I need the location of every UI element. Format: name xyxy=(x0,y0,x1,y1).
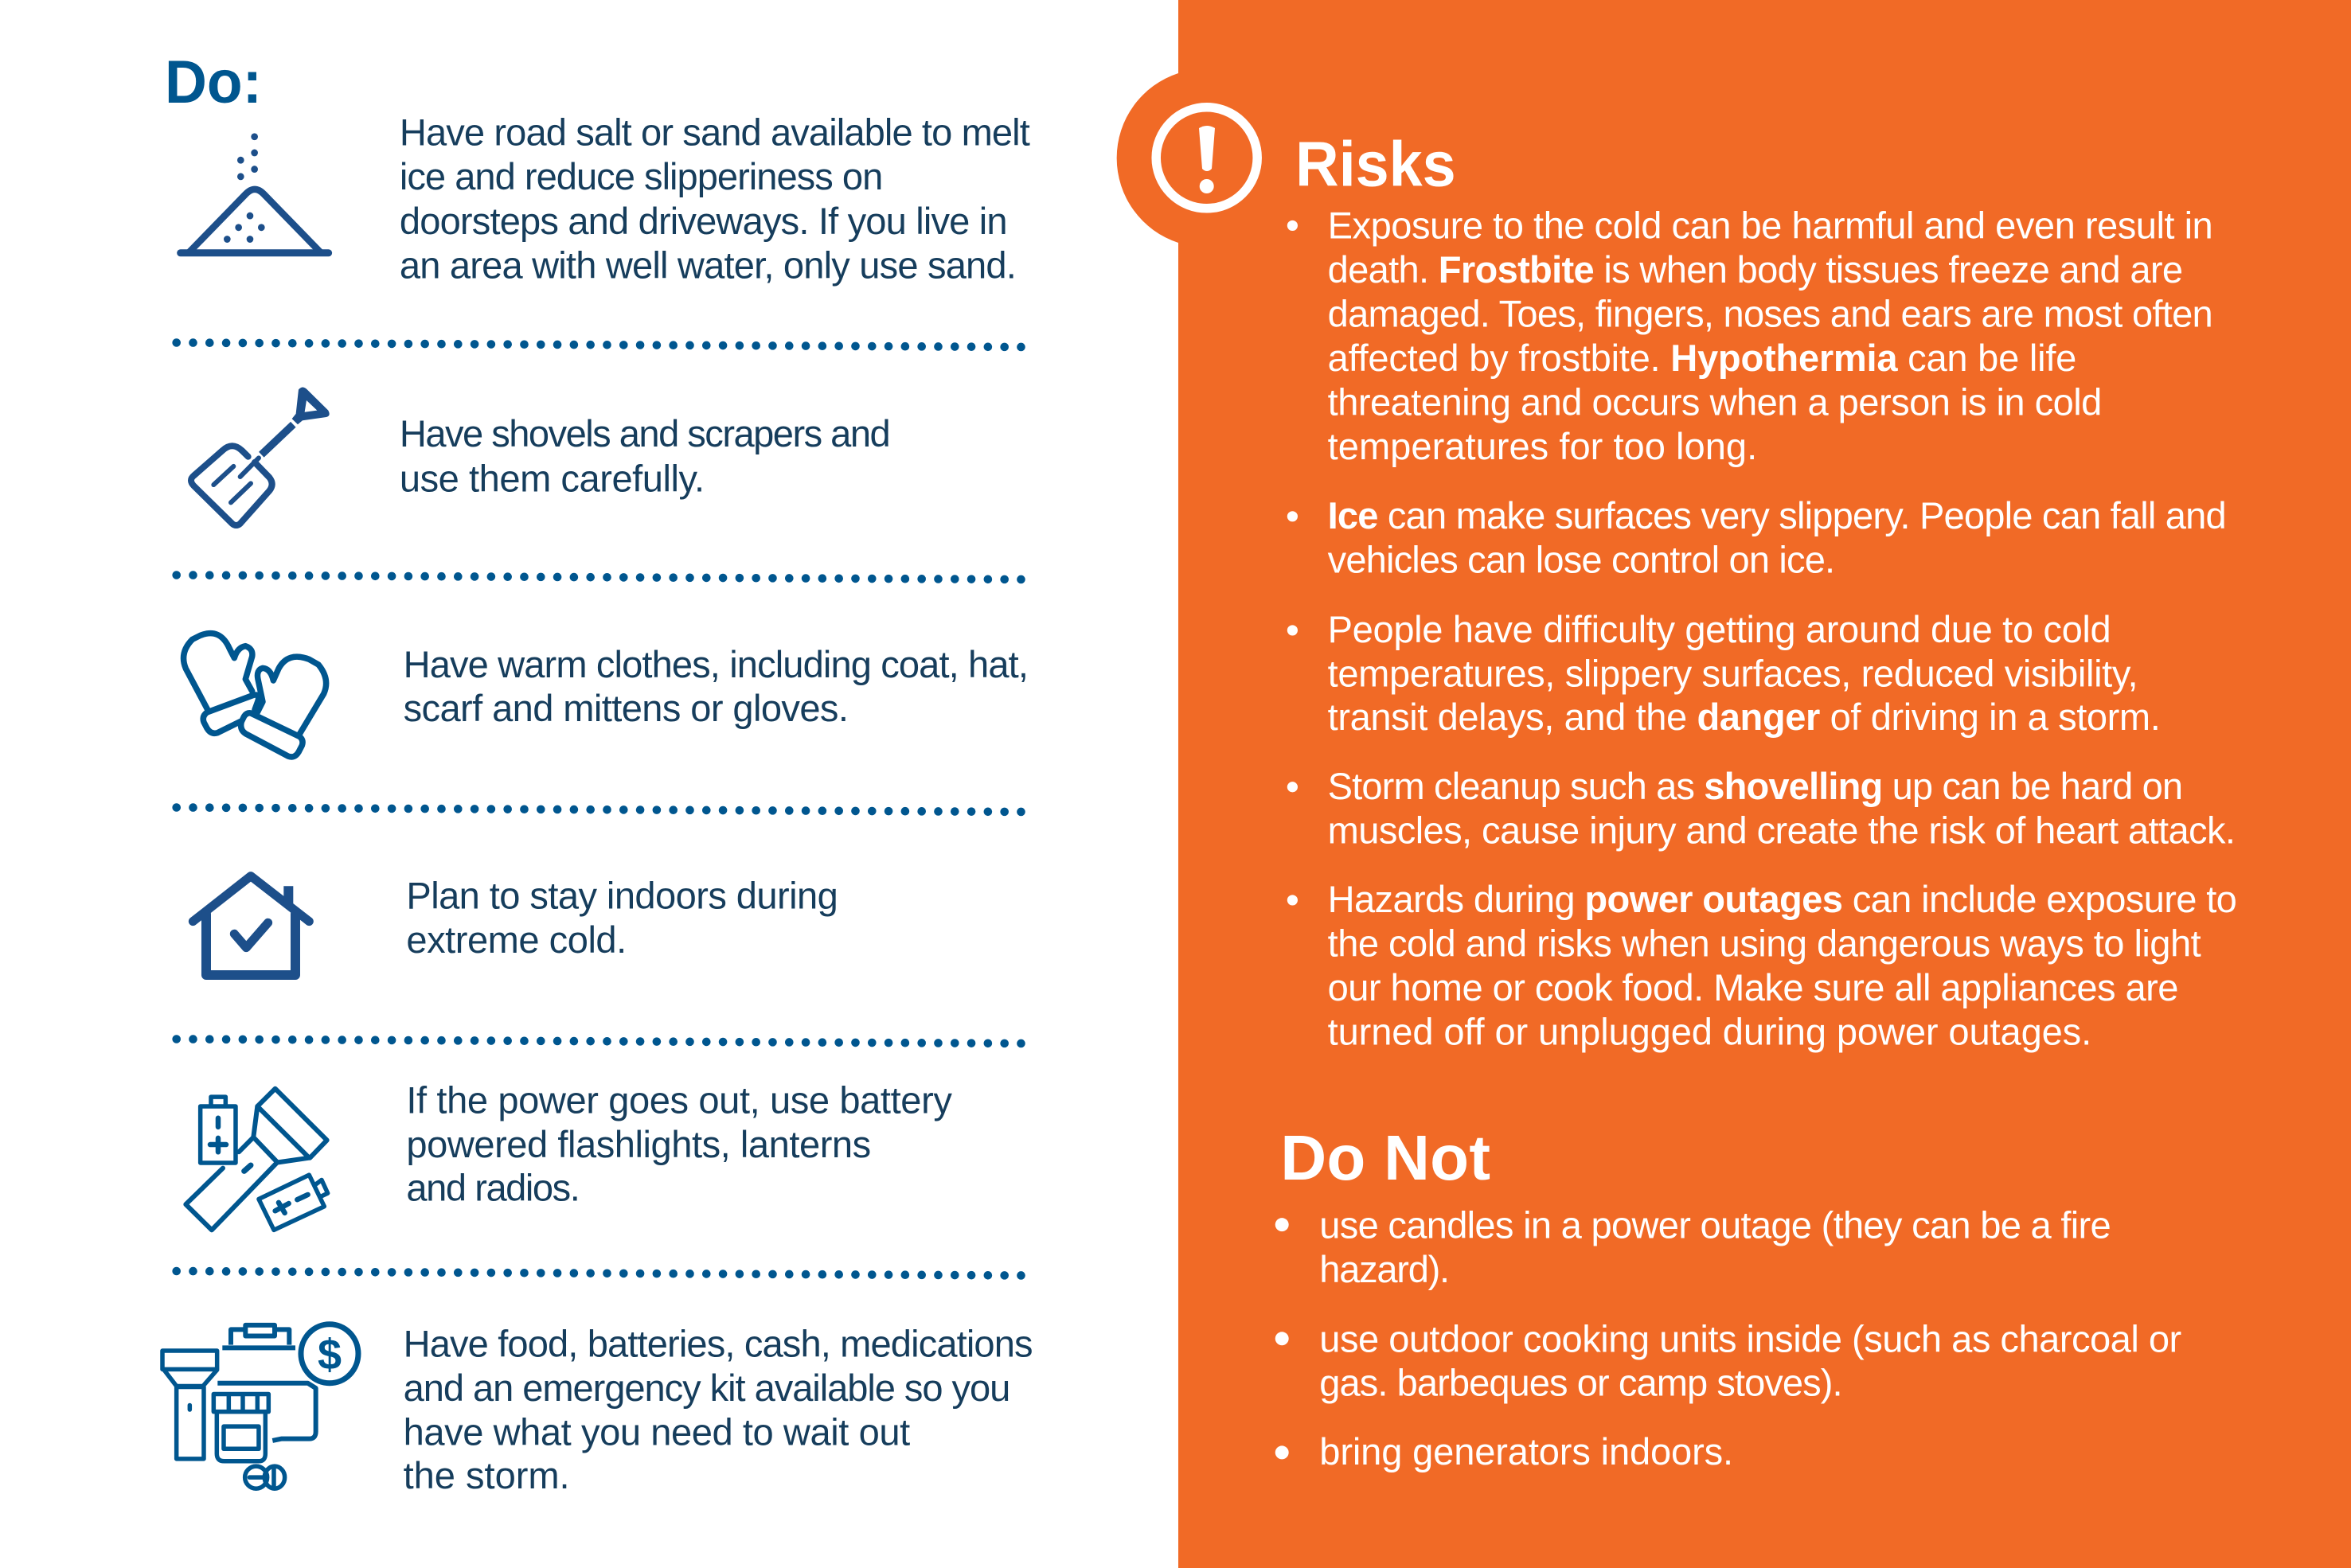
risks list: muscles, cause injury and create the risk of heart attack. xyxy=(1328,809,2236,851)
do not list: use candles in a power outage (they can be a fire xyxy=(1319,1204,2111,1246)
risks list: the cold and risks when using dangerous ways to light xyxy=(1328,922,2201,965)
risks list: Exposure to the cold can be harmful and even result in xyxy=(1328,204,2213,246)
do not list: gas. barbeques or camp stoves). xyxy=(1319,1361,1843,1403)
text: stay indoors xyxy=(406,874,838,961)
risks list: threatening and occurs when a person is in cold xyxy=(1328,381,2102,423)
icon: emergency kit: $ xyxy=(318,1331,342,1379)
panel: do list xyxy=(162,49,1033,1496)
text: shovels: Have shovels and scrapers and xyxy=(400,412,891,454)
panel: risks and do not xyxy=(1117,0,2351,1568)
text: shovels: use them carefully. xyxy=(400,458,705,500)
text: power outage xyxy=(406,1078,952,1209)
risks list xyxy=(1287,204,2237,1053)
item: warm clothes xyxy=(184,634,1029,757)
text: road salt: doorsteps and driveways. If you live in xyxy=(400,200,1008,242)
risks list: transit delays, and the danger of driving in a storm. xyxy=(1328,696,2161,738)
text: emergency kit: have what you need to wait out xyxy=(404,1410,910,1453)
text: stay indoors: Plan to stay indoors during xyxy=(406,874,838,916)
text: road salt: Have road salt or sand available to melt xyxy=(400,111,1030,154)
text: emergency kit: Have food, batteries, cash, medications xyxy=(404,1322,1033,1364)
risks list: affected by frostbite. Hypothermia can be life xyxy=(1328,337,2076,379)
heading: Do: Do: xyxy=(165,49,262,116)
risks list: damaged. Toes, fingers, noses and ears are most often xyxy=(1328,293,2213,335)
risks list: Storm cleanup such as shovelling up can be hard on xyxy=(1328,765,2183,807)
text: warm clothes xyxy=(404,643,1029,729)
text: power outage: If the power goes out, use battery xyxy=(406,1078,952,1121)
risks list: vehicles can lose control on ice. xyxy=(1328,538,1835,580)
text: power outage: and radios. xyxy=(406,1167,580,1209)
text: road salt xyxy=(400,111,1030,286)
text: road salt: an area with well water, only use sand. xyxy=(400,244,1017,286)
do not list: hazard). xyxy=(1319,1248,1450,1290)
icon: emergency kit xyxy=(162,1324,358,1488)
risks list: Ice can make surfaces very slippery. People can fall and xyxy=(1328,494,2227,536)
risks list: death. Frostbite is when body tissues freeze and are xyxy=(1328,248,2183,291)
do not list xyxy=(1275,1204,2181,1472)
text: emergency kit: and an emergency kit available so you xyxy=(404,1367,1010,1409)
item: emergency kit xyxy=(162,1322,1033,1496)
icon: mittens xyxy=(184,634,326,757)
text: shovels xyxy=(400,412,891,500)
text: warm clothes: Have warm clothes, including coat, hat, xyxy=(404,643,1029,685)
risks list: temperatures, slippery surfaces, reduced visibility, xyxy=(1328,653,2138,695)
text: power outage: powered flashlights, lanterns xyxy=(406,1123,871,1165)
risks list: temperatures for too long. xyxy=(1328,425,1757,467)
heading: Do Not: Do Not xyxy=(1280,1122,1490,1193)
do not list: use outdoor cooking units inside (such as charcoal or xyxy=(1319,1318,2181,1360)
icon: house with check xyxy=(193,876,309,975)
icon: shovel xyxy=(191,388,330,525)
item: road salt xyxy=(181,111,1030,286)
item: stay indoors xyxy=(193,874,838,975)
heading: Risks: Risks xyxy=(1295,129,1456,200)
text: emergency kit xyxy=(404,1322,1033,1496)
risks list: our home or cook food. Make sure all appliances are xyxy=(1328,966,2178,1008)
icon: salt pile xyxy=(181,133,329,253)
item: power outage xyxy=(186,1078,952,1230)
text: stay indoors: extreme cold. xyxy=(406,919,627,961)
risks list: turned off or unplugged during power outages. xyxy=(1328,1011,2091,1053)
text: road salt: ice and reduce slipperiness on xyxy=(400,155,883,197)
icon: exclamation in circle xyxy=(1156,107,1257,209)
text: emergency kit: the storm. xyxy=(404,1454,570,1496)
icon: flashlight and batteries xyxy=(186,1089,328,1230)
orange background xyxy=(1117,0,2351,1568)
text: warm clothes: scarf and mittens or gloves. xyxy=(404,687,849,729)
risks list: People have difficulty getting around due to cold xyxy=(1328,608,2111,650)
item: shovels xyxy=(191,388,891,525)
do not list: bring generators indoors. xyxy=(1319,1430,1733,1472)
risks list: Hazards during power outages can include exposure to xyxy=(1328,878,2237,920)
